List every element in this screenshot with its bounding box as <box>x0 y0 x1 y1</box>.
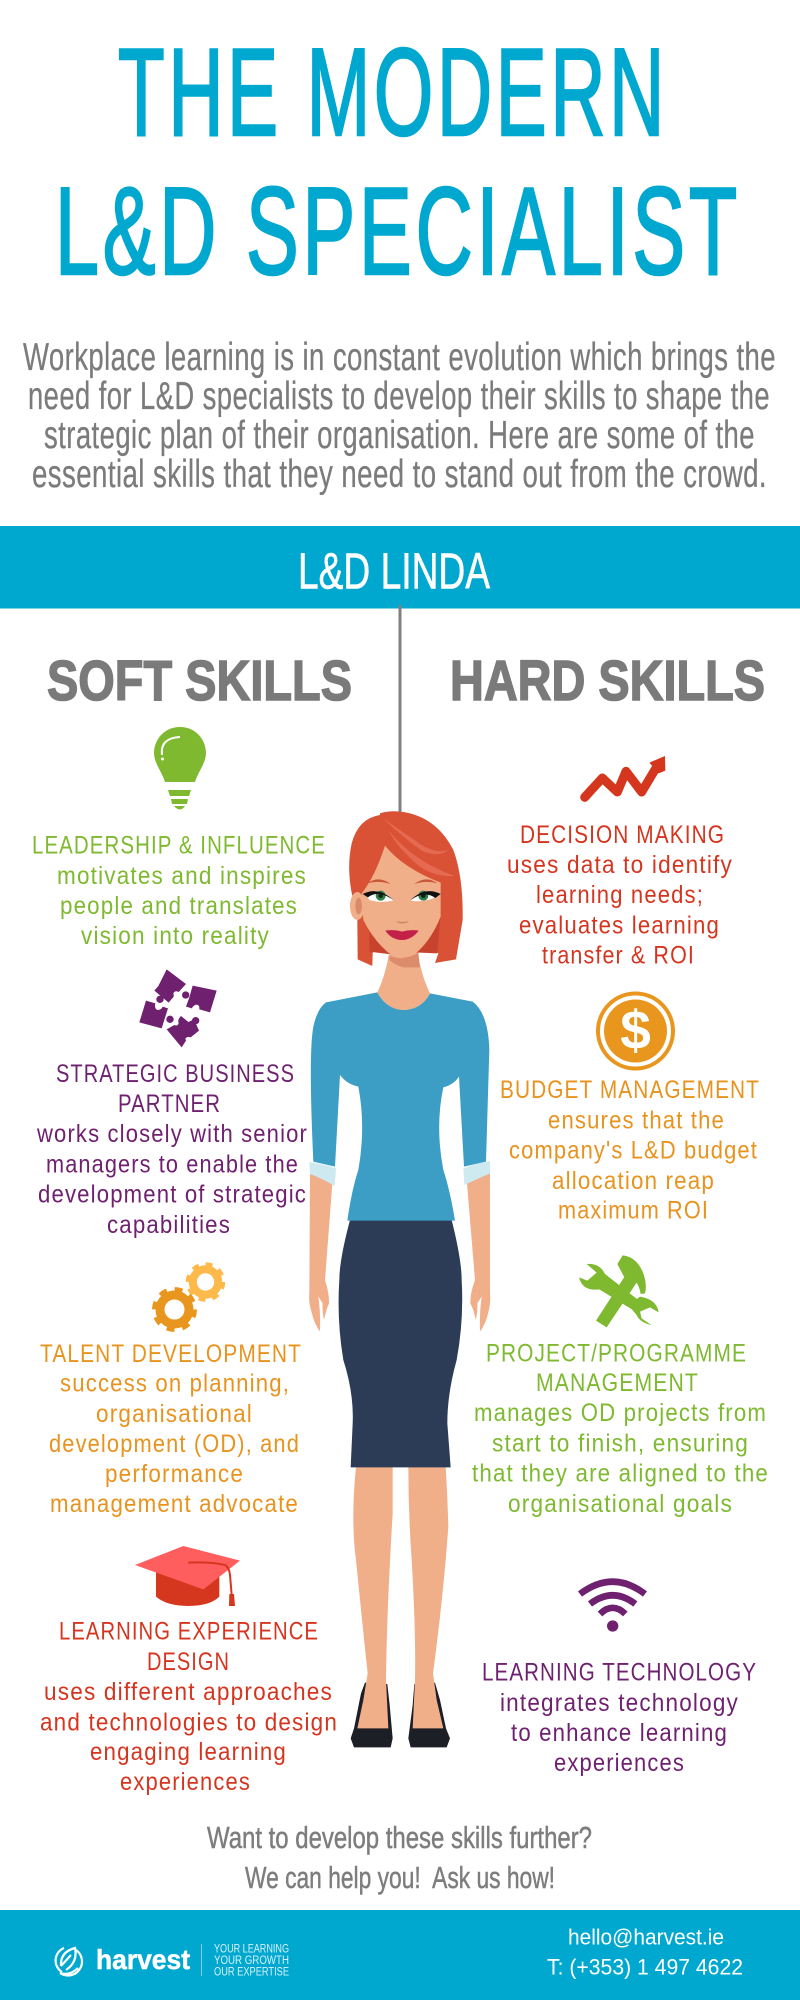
ear <box>350 892 365 920</box>
neck <box>377 952 430 1010</box>
figure: L&D Linda <box>309 811 490 1747</box>
heading: LEADERSHIP & INFLUENCE <box>32 832 326 860</box>
description: start to finish, ensuring <box>492 1430 749 1458</box>
call to action <box>207 1820 592 1895</box>
description: vision into reality <box>81 922 270 950</box>
cuffs <box>309 1161 490 1186</box>
heading: MANAGEMENT <box>536 1369 699 1397</box>
panel: budget management <box>500 994 760 1224</box>
nose <box>397 922 408 923</box>
description: ensures that the <box>548 1106 725 1134</box>
icon: hammer and wrench <box>579 1255 659 1327</box>
hair highlight <box>383 818 455 876</box>
name banner: L&D Linda: L&D LINDA <box>298 542 490 600</box>
icon: gears <box>154 1264 224 1330</box>
panel: learning experience design <box>40 1546 338 1796</box>
harvest logo <box>56 1944 289 1978</box>
description <box>49 1370 300 1518</box>
connector line <box>398 605 402 815</box>
tagline: YOUR LEARNING <box>214 1944 289 1956</box>
description: integrates technology <box>500 1689 739 1717</box>
description: maximum ROI <box>558 1196 709 1224</box>
description <box>36 1120 308 1239</box>
skirt <box>339 1220 462 1467</box>
description <box>40 1678 338 1796</box>
description: development of strategic <box>38 1180 307 1208</box>
tagline: OUR EXPERTISE <box>214 1966 289 1978</box>
panel: leadership and influence <box>32 727 326 950</box>
description <box>509 1106 758 1224</box>
description: works closely with senior <box>36 1120 308 1148</box>
description: transfer & ROI <box>542 942 695 970</box>
description: manages OD projects from <box>474 1399 767 1427</box>
description: allocation reap <box>552 1167 715 1195</box>
description: organisational <box>96 1400 253 1428</box>
description: motivates and inspires <box>57 862 307 890</box>
contact details: T: (+353) 1 497 4622 <box>547 1954 743 1980</box>
description <box>507 851 733 970</box>
description: to enhance learning <box>511 1719 728 1747</box>
icon: dollar coin: $ <box>620 999 651 1061</box>
panel: learning technology <box>482 1582 757 1777</box>
name banner: L&D Linda <box>0 526 800 608</box>
contact details <box>547 1924 743 1980</box>
description: people and translates <box>60 892 298 920</box>
heading: DESIGN <box>147 1648 230 1676</box>
eyes <box>363 891 441 902</box>
intro text <box>23 336 776 496</box>
panel: strategic business partner <box>36 969 308 1239</box>
heading: soft skills: SOFT SKILLS <box>47 649 352 713</box>
description <box>57 862 307 950</box>
call to action: Want to develop these skills further? <box>207 1820 592 1855</box>
description: evaluates learning <box>519 912 720 940</box>
description: success on planning, <box>60 1370 290 1398</box>
heading: PARTNER <box>118 1090 221 1118</box>
description: organisational goals <box>508 1490 733 1518</box>
heading: TALENT DEVELOPMENT <box>40 1340 302 1368</box>
icon: graduation cap <box>135 1546 240 1606</box>
icon: wifi <box>580 1582 645 1632</box>
title <box>55 24 741 301</box>
heading: STRATEGIC BUSINESS <box>56 1060 295 1088</box>
description: and technologies to design <box>40 1708 338 1736</box>
icon: light bulb <box>154 727 206 810</box>
panel: decision making <box>507 756 733 970</box>
description: experiences <box>554 1749 685 1777</box>
heading <box>59 1618 319 1676</box>
blue top <box>311 992 489 1221</box>
description: management advocate <box>50 1490 299 1518</box>
description: development (OD), and <box>49 1430 300 1458</box>
hair shadow <box>369 913 441 954</box>
description <box>500 1689 739 1777</box>
heading <box>56 1060 295 1118</box>
description: managers to enable the <box>46 1150 299 1178</box>
wordmark: harvest <box>96 1944 190 1975</box>
description: learning needs; <box>536 881 704 909</box>
description: experiences <box>120 1768 251 1796</box>
tagline: YOUR GROWTH <box>214 1955 289 1967</box>
contact details: hello@harvest.ie <box>568 1924 724 1950</box>
heading: PROJECT/PROGRAMME <box>486 1340 747 1368</box>
description: company's L&D budget <box>509 1136 758 1164</box>
description <box>472 1399 769 1518</box>
legs <box>353 1467 448 1728</box>
icon: dollar coin <box>598 994 673 1068</box>
heading <box>486 1340 747 1397</box>
eyebrows <box>367 879 437 884</box>
description: uses different approaches <box>44 1678 333 1706</box>
hair <box>349 811 463 966</box>
description: engaging learning <box>90 1738 287 1766</box>
call to action: We can help you! Ask us how! <box>245 1860 555 1895</box>
face <box>362 846 441 959</box>
arms <box>309 1170 490 1332</box>
panel: talent development <box>40 1264 302 1518</box>
icon: rising arrow <box>585 756 665 797</box>
heading: DECISION MAKING <box>520 821 725 849</box>
description: capabilities <box>107 1211 231 1239</box>
description: performance <box>105 1460 244 1488</box>
icon: puzzle pieces <box>139 969 217 1047</box>
lips <box>385 930 419 940</box>
footer band <box>0 1910 800 2000</box>
neck shadow <box>389 953 420 967</box>
shoes <box>351 1683 450 1747</box>
heading: LEARNING EXPERIENCE <box>59 1618 319 1646</box>
logo mark <box>56 1948 82 1976</box>
panel: project and programme management <box>472 1255 769 1518</box>
description: that they are aligned to the <box>472 1460 769 1488</box>
tagline <box>214 1944 289 1978</box>
description: uses data to identify <box>507 851 733 879</box>
